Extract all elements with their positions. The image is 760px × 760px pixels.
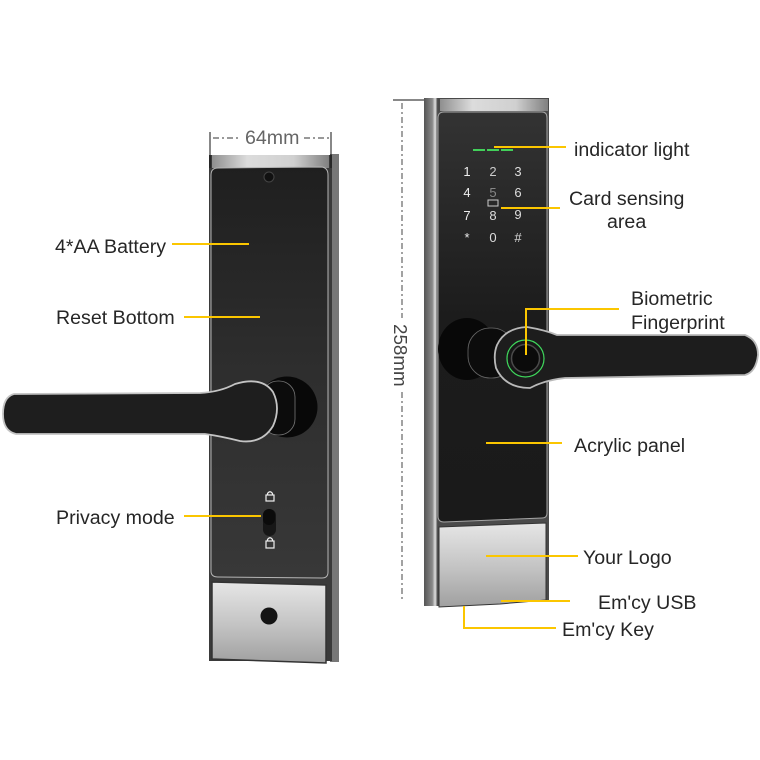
callout: Acrylic panel: Acrylic panel <box>574 435 685 457</box>
callout: Card sensing area: area <box>607 211 646 233</box>
keypad: 6 <box>514 185 522 200</box>
keypad: 5 <box>489 185 497 200</box>
right rosette <box>438 318 496 380</box>
callout: Biometric Fingerprint: Fingerprint <box>631 312 725 334</box>
keypad: 2 <box>489 164 497 179</box>
bottom silver plate <box>439 523 546 607</box>
callout: Em'cy USB: Em'cy USB <box>598 592 696 614</box>
black keypad panel <box>438 112 547 522</box>
keyhole <box>260 608 278 624</box>
fingerprint sensor <box>507 340 544 377</box>
keypad: 7 <box>463 208 471 223</box>
screw <box>264 172 274 182</box>
dimension: 64mm <box>210 127 331 168</box>
callout: indicator light: indicator light <box>574 139 690 161</box>
callout: Em'cy Key: Em'cy Key <box>562 619 654 641</box>
dimension: 258mm: 258mm <box>390 324 411 387</box>
keypad: 8 <box>489 208 497 223</box>
right lock body <box>424 98 549 607</box>
right handle <box>468 327 758 388</box>
keypad: 3 <box>514 164 522 179</box>
lock icons <box>266 492 274 548</box>
left handle <box>3 381 295 441</box>
callout: Card sensing area <box>501 188 684 233</box>
callout: 4*AA Battery: 4*AA Battery <box>55 236 166 258</box>
top silver plate <box>212 155 329 168</box>
callout: Reset Bottom: Reset Bottom <box>56 307 175 329</box>
callout: Em'cy Key <box>464 606 654 641</box>
callout: Your Logo: Your Logo <box>583 547 672 569</box>
indicator light <box>473 149 513 151</box>
privacy switch <box>263 509 276 536</box>
bottom silver plate <box>212 582 326 663</box>
keypad: 0 <box>489 230 497 245</box>
black front panel <box>211 167 328 578</box>
keypad: 1 <box>463 164 471 179</box>
callout: Card sensing area: Card sensing <box>569 188 684 210</box>
keypad: * <box>464 230 470 245</box>
dimension: 64mm: 64mm <box>245 127 299 149</box>
keypad: 9 <box>514 207 522 222</box>
card icon <box>488 200 498 206</box>
keypad: # <box>514 230 522 245</box>
keypad <box>463 164 522 245</box>
top silver plate <box>440 99 548 111</box>
left rosette <box>256 376 318 438</box>
callout: Biometric Fingerprint <box>526 288 725 355</box>
callout: Biometric Fingerprint: Biometric <box>631 288 713 310</box>
left lock body <box>209 154 339 663</box>
callout: Privacy mode: Privacy mode <box>56 507 175 529</box>
keypad: 4 <box>463 185 471 200</box>
